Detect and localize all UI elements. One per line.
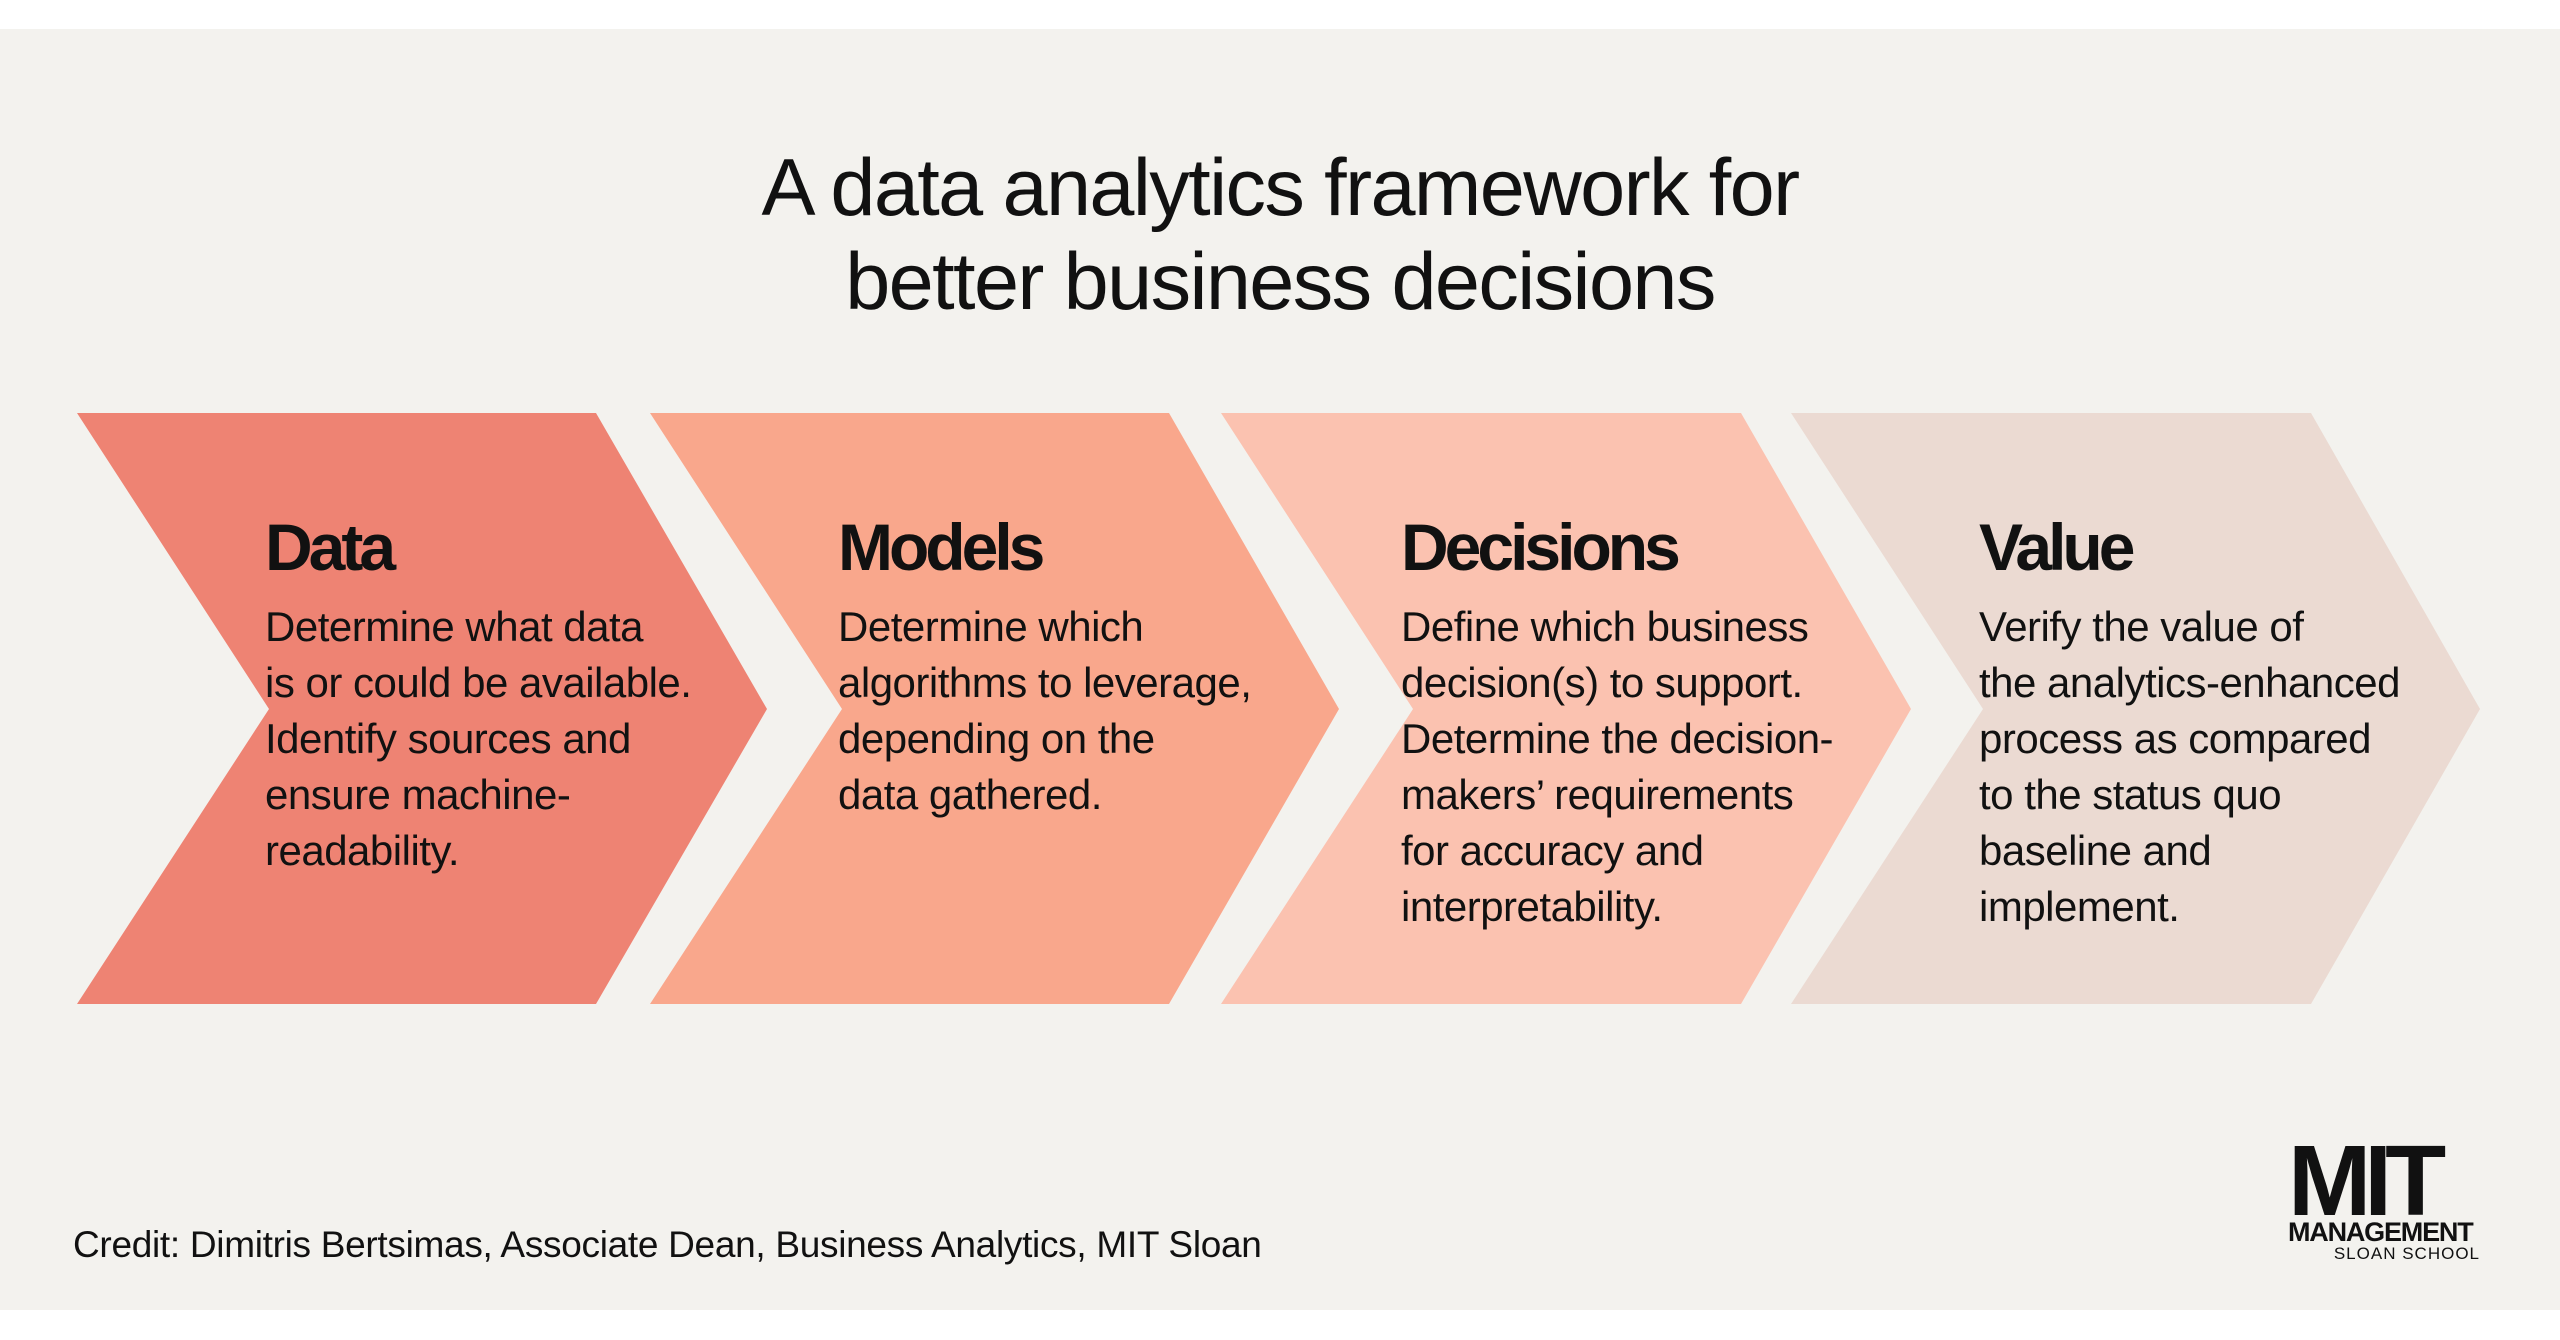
step: value: baseline and bbox=[1979, 827, 2211, 874]
chevron: data bbox=[77, 413, 767, 1004]
step: models: Determine which bbox=[838, 603, 1143, 650]
step: decisions: makers’ requirements bbox=[1401, 771, 1793, 818]
chevron: models bbox=[650, 413, 1339, 1004]
step: decisions: decision(s) to support. bbox=[1401, 659, 1803, 706]
title: better business decisions bbox=[845, 237, 1715, 327]
step: value: implement. bbox=[1979, 883, 2179, 930]
step: value: the analytics-enhanced bbox=[1979, 659, 2400, 706]
step: decisions: Decisions bbox=[1401, 510, 1677, 584]
step: data: ensure machine- bbox=[265, 771, 570, 818]
step: models: depending on the bbox=[838, 715, 1155, 762]
step: decisions bbox=[1401, 510, 1833, 930]
step: value: to the status quo bbox=[1979, 771, 2281, 818]
logo: MIT Management Sloan School: SLOAN SCHOOL bbox=[2334, 1244, 2480, 1263]
step: data: Identify sources and bbox=[265, 715, 631, 762]
logo: MIT Management Sloan School: MIT bbox=[2288, 1125, 2439, 1237]
step: data: is or could be available. bbox=[265, 659, 691, 706]
logo: MIT Management Sloan School: MANAGEMENT bbox=[2288, 1217, 2472, 1247]
title bbox=[762, 143, 1799, 327]
step: decisions: Define which business bbox=[1401, 603, 1808, 650]
credit: Credit: Dimitris Bertsimas, Associate Dean, Business Analytics, MIT Sloan bbox=[73, 1224, 1262, 1265]
step: value: Verify the value of bbox=[1979, 603, 2303, 650]
step: decisions: Determine the decision- bbox=[1401, 715, 1833, 762]
chevron: decisions bbox=[1221, 413, 1911, 1004]
chevron: value bbox=[1791, 413, 2480, 1004]
title: A data analytics framework for bbox=[762, 143, 1798, 233]
step: data bbox=[265, 510, 691, 874]
step: models: Models bbox=[838, 510, 1041, 584]
step: decisions: for accuracy and bbox=[1401, 827, 1704, 874]
step: value: Value bbox=[1979, 510, 2131, 584]
logo: MIT Management Sloan School bbox=[2288, 1125, 2480, 1263]
step: models: algorithms to leverage, bbox=[838, 659, 1251, 706]
step: data: readability. bbox=[265, 827, 459, 874]
step: models: data gathered. bbox=[838, 771, 1102, 818]
step: data: Determine what data bbox=[265, 603, 643, 650]
step: data: Data bbox=[265, 510, 392, 584]
step: value: process as compared bbox=[1979, 715, 2371, 762]
step: models bbox=[838, 510, 1251, 818]
step: value bbox=[1979, 510, 2400, 930]
step: decisions: interpretability. bbox=[1401, 883, 1663, 930]
